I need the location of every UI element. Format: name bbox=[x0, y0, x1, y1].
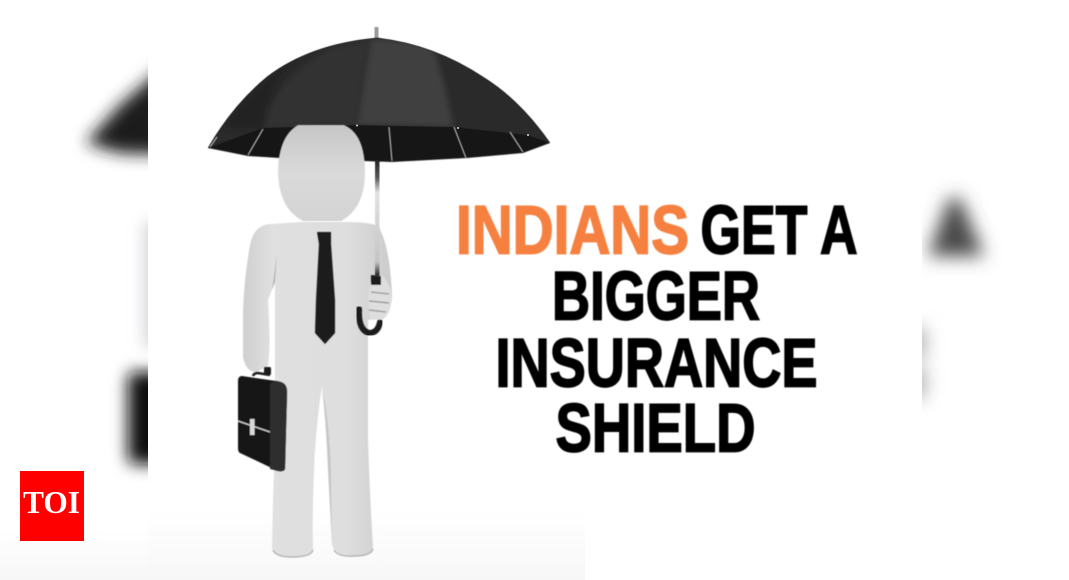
logo: TOI: TOI bbox=[23, 484, 80, 520]
umbrella rib tips bbox=[356, 124, 529, 136]
headline word: INDIANS: INDIANS bbox=[456, 192, 689, 268]
hand gripping umbrella bbox=[368, 275, 392, 320]
tie bbox=[315, 232, 335, 344]
figure body bbox=[243, 222, 392, 557]
headline line: INSURANCE: INSURANCE bbox=[496, 324, 818, 402]
headline bbox=[456, 192, 858, 466]
headline line: SHIELD: SHIELD bbox=[556, 390, 756, 466]
blurred backdrop: right bbox=[905, 198, 984, 398]
blurred backdrop: left bbox=[78, 63, 148, 478]
logo: TOI bbox=[20, 471, 84, 541]
centre white panel bbox=[148, 0, 922, 580]
briefcase bbox=[238, 367, 287, 471]
umbrella hook handle bbox=[359, 309, 380, 333]
floor shadow under figure bbox=[148, 510, 585, 580]
headline words: GET A: GET A bbox=[700, 192, 858, 268]
umbrella canopy bbox=[208, 27, 550, 162]
headline line: BIGGER: BIGGER bbox=[552, 258, 760, 334]
umbrella ribs bbox=[210, 127, 523, 161]
illustration: businessman with umbrella bbox=[208, 27, 550, 557]
head bbox=[278, 125, 365, 221]
umbrella shaft bbox=[375, 160, 380, 276]
